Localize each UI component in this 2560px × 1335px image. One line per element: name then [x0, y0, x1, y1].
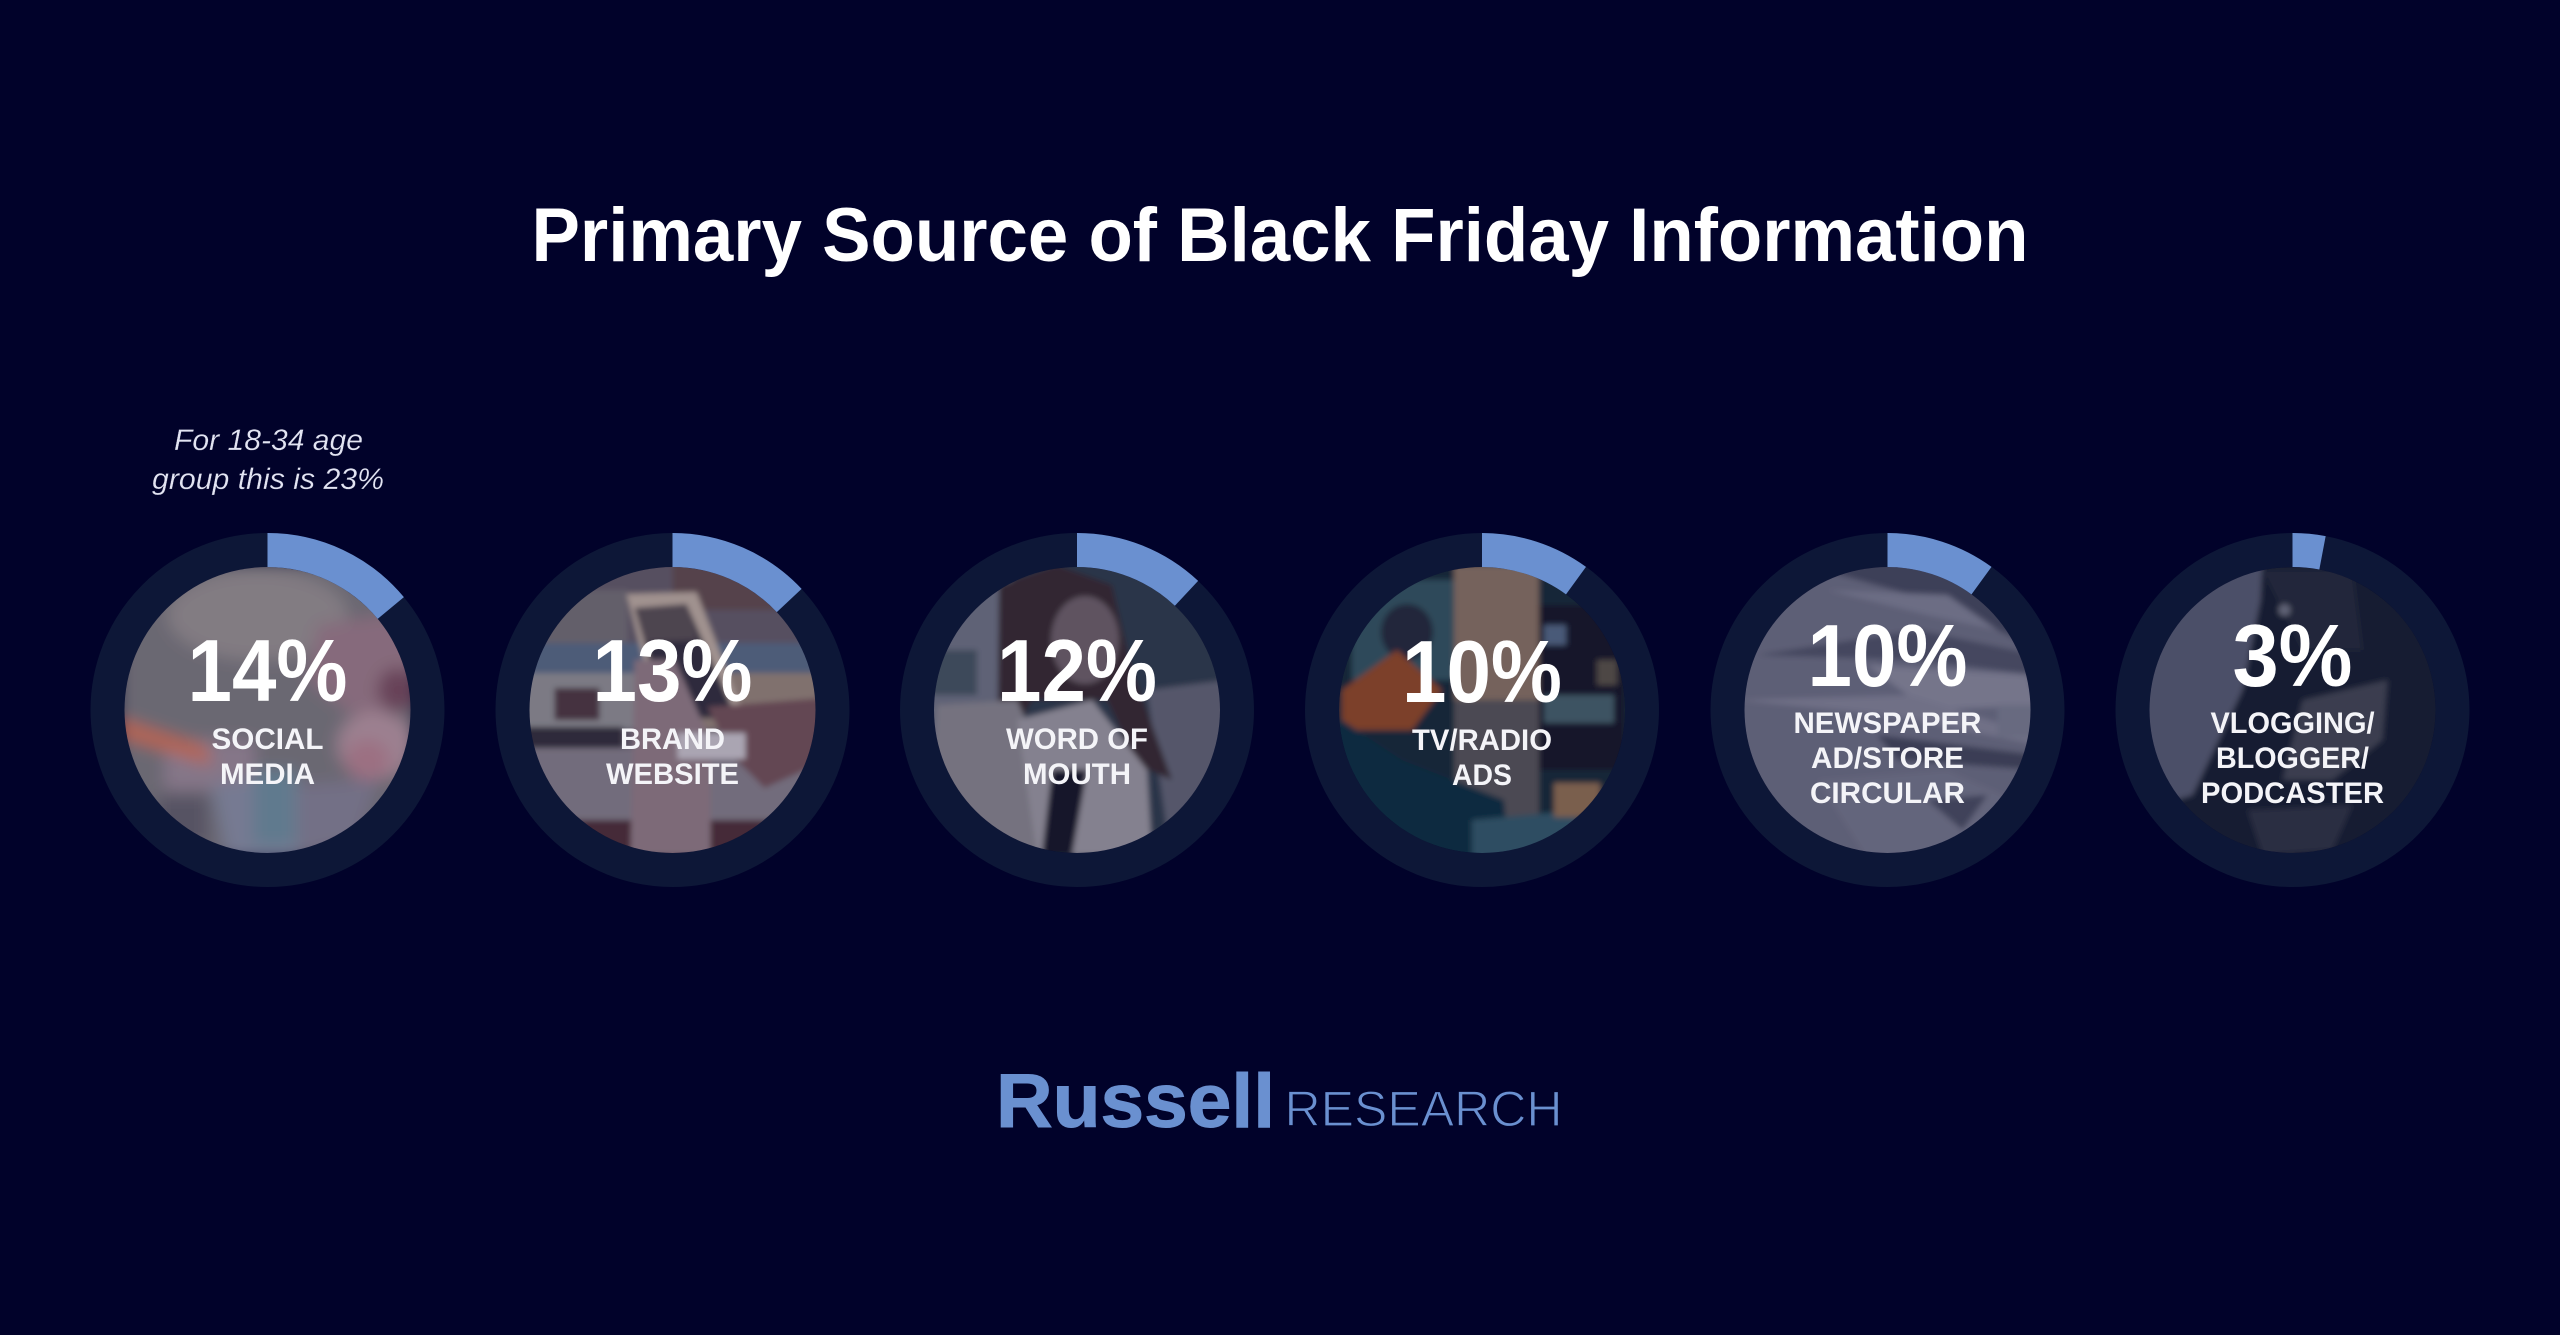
label: ADS: [1452, 759, 1512, 792]
donut track: [1322, 550, 1642, 870]
callout: 18-34 age group note: For 18-34 age: [174, 424, 363, 457]
label: [1006, 723, 1148, 791]
photo: folded newspapers: [1738, 560, 2038, 860]
photo: hand with phone: [118, 560, 418, 860]
logo: Russell Research: RESEARCH: [1284, 1081, 1562, 1137]
label: [212, 723, 324, 791]
panel: word of mouth 12%: [917, 550, 1237, 870]
panel: newspaper ad/store circular 10%: [1728, 550, 2048, 870]
progress arc: [2292, 550, 2322, 553]
value: 14%: [188, 621, 348, 720]
donut track: [512, 550, 832, 870]
progress arc: [1077, 550, 1186, 593]
label: BRAND: [620, 723, 725, 756]
label: MEDIA: [220, 758, 315, 791]
value: 10%: [1402, 622, 1562, 721]
photo: microphone and headphones: [2142, 560, 2442, 860]
label: MOUTH: [1023, 758, 1131, 791]
label: SOCIAL: [212, 723, 324, 756]
callout: 18-34 age group note: group this is 23%: [152, 463, 384, 496]
callout: 18-34 age group note: [152, 424, 384, 496]
progress arc: [268, 550, 391, 608]
panel: social media 14%: [108, 550, 428, 870]
title: Primary Source of Black Friday Information: [532, 193, 2028, 278]
panel: tv/radio ads 10%: [1322, 550, 1642, 870]
value: 13%: [592, 621, 752, 720]
label: [1794, 707, 1982, 810]
label: TV/RADIO: [1412, 724, 1552, 757]
photo: people watching tv: [1332, 560, 1632, 860]
donut track: [108, 550, 428, 870]
label: NEWSPAPER: [1794, 707, 1982, 740]
logo: Russell Research: Russell: [996, 1059, 1275, 1144]
photo: woman on the phone: [927, 560, 1227, 860]
label: [2201, 707, 2384, 810]
value: 3%: [2232, 606, 2352, 705]
label: WEBSITE: [606, 758, 739, 791]
photo: hands holding smartphone: [522, 560, 822, 860]
label: PODCASTER: [2201, 777, 2384, 810]
label: AD/STORE: [1811, 742, 1964, 775]
label: CIRCULAR: [1810, 777, 1965, 810]
label: [606, 723, 739, 791]
label: [1412, 724, 1552, 792]
panel: brand website 13%: [512, 550, 832, 870]
progress arc: [672, 550, 789, 600]
label: BLOGGER/: [2216, 742, 2370, 775]
donut track: [917, 550, 1237, 870]
panel: vlogging/blogger/podcaster 3%: [2132, 550, 2452, 870]
value: 10%: [1808, 606, 1968, 705]
donut track: [1728, 550, 2048, 870]
progress arc: [1482, 550, 1576, 581]
label: WORD OF: [1006, 723, 1148, 756]
label: VLOGGING/: [2210, 707, 2375, 740]
progress arc: [1888, 550, 1982, 581]
logo: Russell Research: [996, 1059, 1562, 1144]
value: 12%: [997, 621, 1157, 720]
donut track: [2132, 550, 2452, 870]
